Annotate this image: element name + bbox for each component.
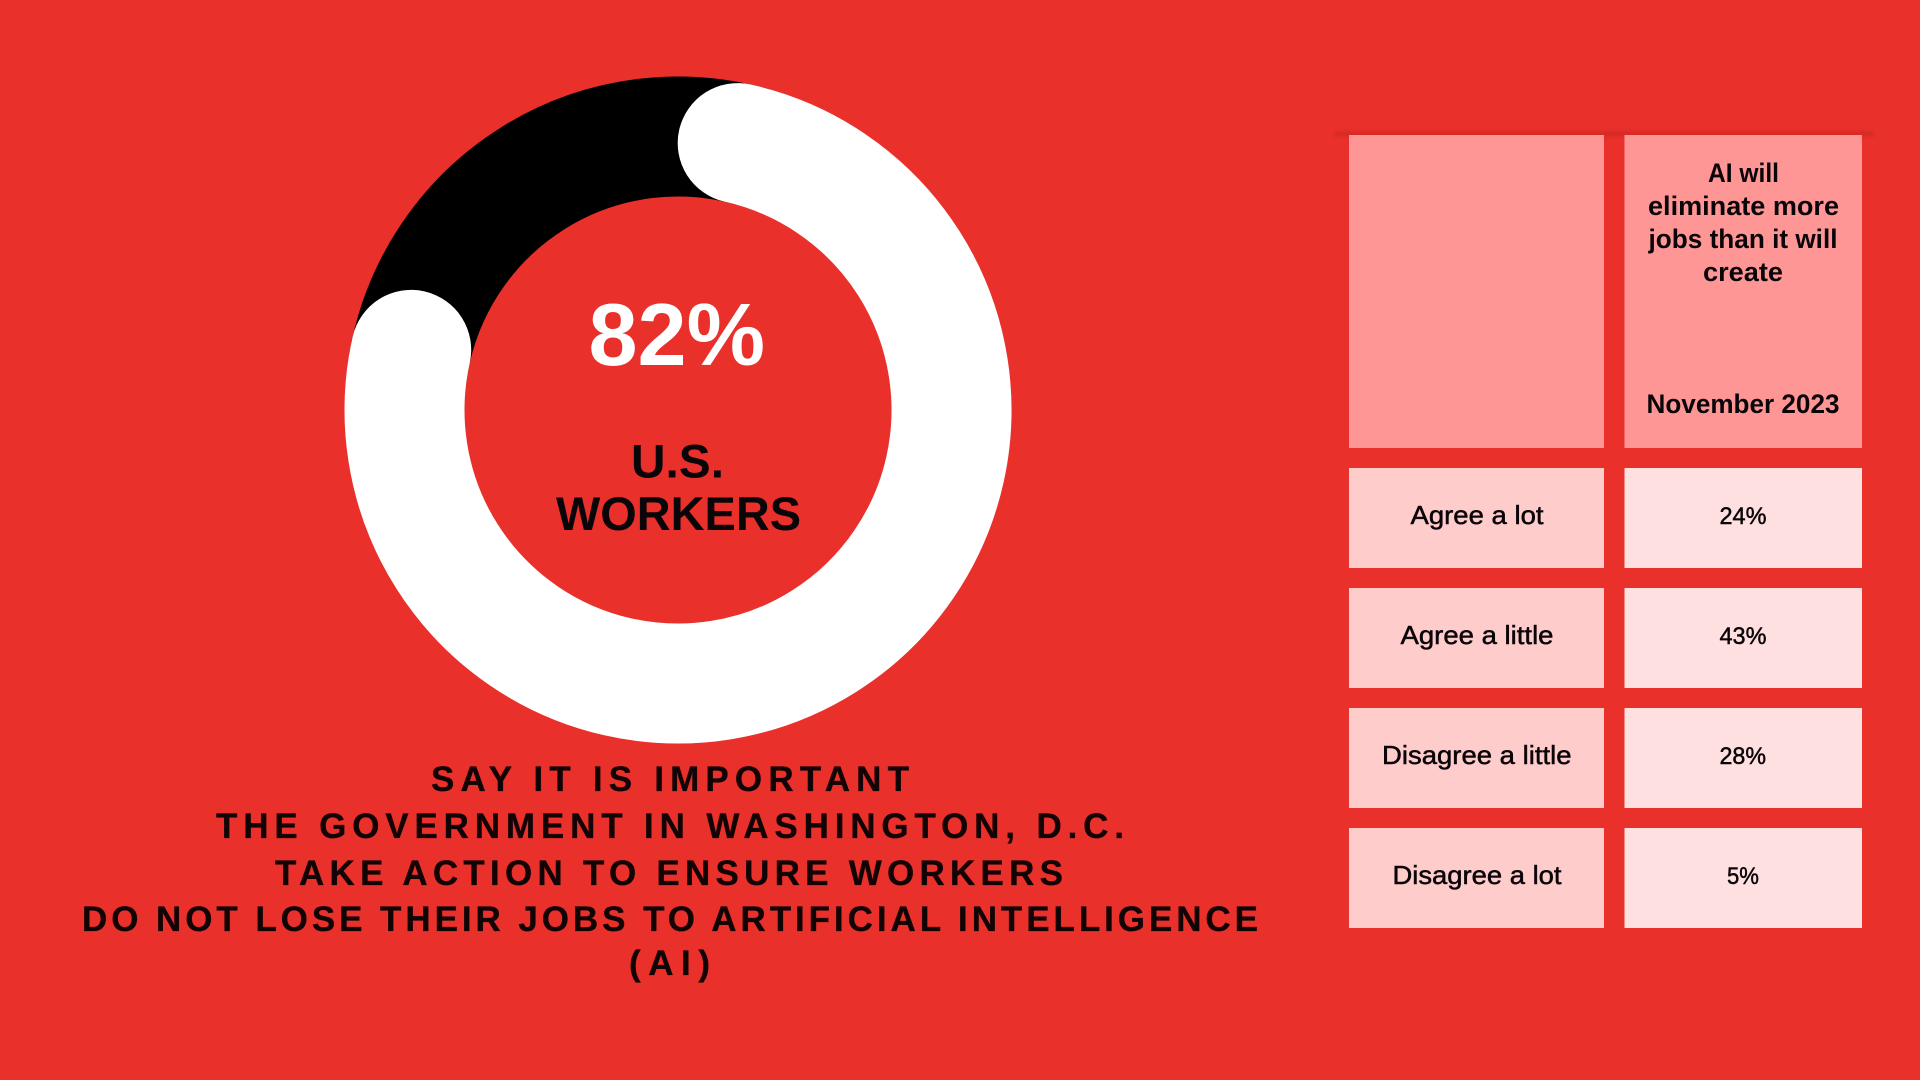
row: disagree a lot: Disagree a lot [1392,860,1562,890]
row: agree a lot: 24% [1720,503,1766,530]
column header cell: create [1703,257,1783,287]
row: disagree a lot [1349,828,1862,928]
row: agree a lot [1349,468,1862,568]
donut black segment [409,137,753,362]
column header cell: eliminate more [1648,191,1839,221]
donut label: U.S. workers: U.S. [631,434,724,488]
donut white segment [405,143,952,684]
table top shadow line [1335,132,1873,136]
row: agree a little: 43% [1720,623,1766,650]
caption text: (AI) [629,944,710,983]
row: disagree a little [1349,708,1862,808]
caption text: THE GOVERNMENT IN WASHINGTON, D.C. [216,807,1124,846]
row: disagree a little: Disagree a little [1382,740,1572,770]
caption text: TAKE ACTION TO ENSURE WORKERS [275,854,1063,893]
caption text: SAY IT IS IMPORTANT [431,760,909,799]
column header cell: AI will [1708,158,1779,188]
column header cell: November 2023 [1646,389,1840,419]
empty header cell [1349,135,1604,448]
donut label: U.S. workers: WORKERS [556,487,801,540]
row: disagree a little: 28% [1720,743,1766,770]
table: AI will eliminate more jobs than it will create [1335,132,1873,928]
column header cell: jobs than it will [1648,224,1838,254]
row: agree a little [1349,588,1862,688]
row: agree a little: Agree a little [1400,620,1554,650]
column header cell [1624,135,1862,448]
row: agree a lot: Agree a lot [1410,500,1544,530]
donut chart: 82% of U.S. workers [405,137,952,684]
caption text: DO NOT LOSE THEIR JOBS TO ARTIFICIAL INTELLIGENCE [82,900,1258,939]
value: 82%: 82% [588,285,765,384]
caption text [82,760,1258,983]
row: disagree a lot: 5% [1727,863,1759,890]
donut label: U.S. workers [556,434,801,540]
